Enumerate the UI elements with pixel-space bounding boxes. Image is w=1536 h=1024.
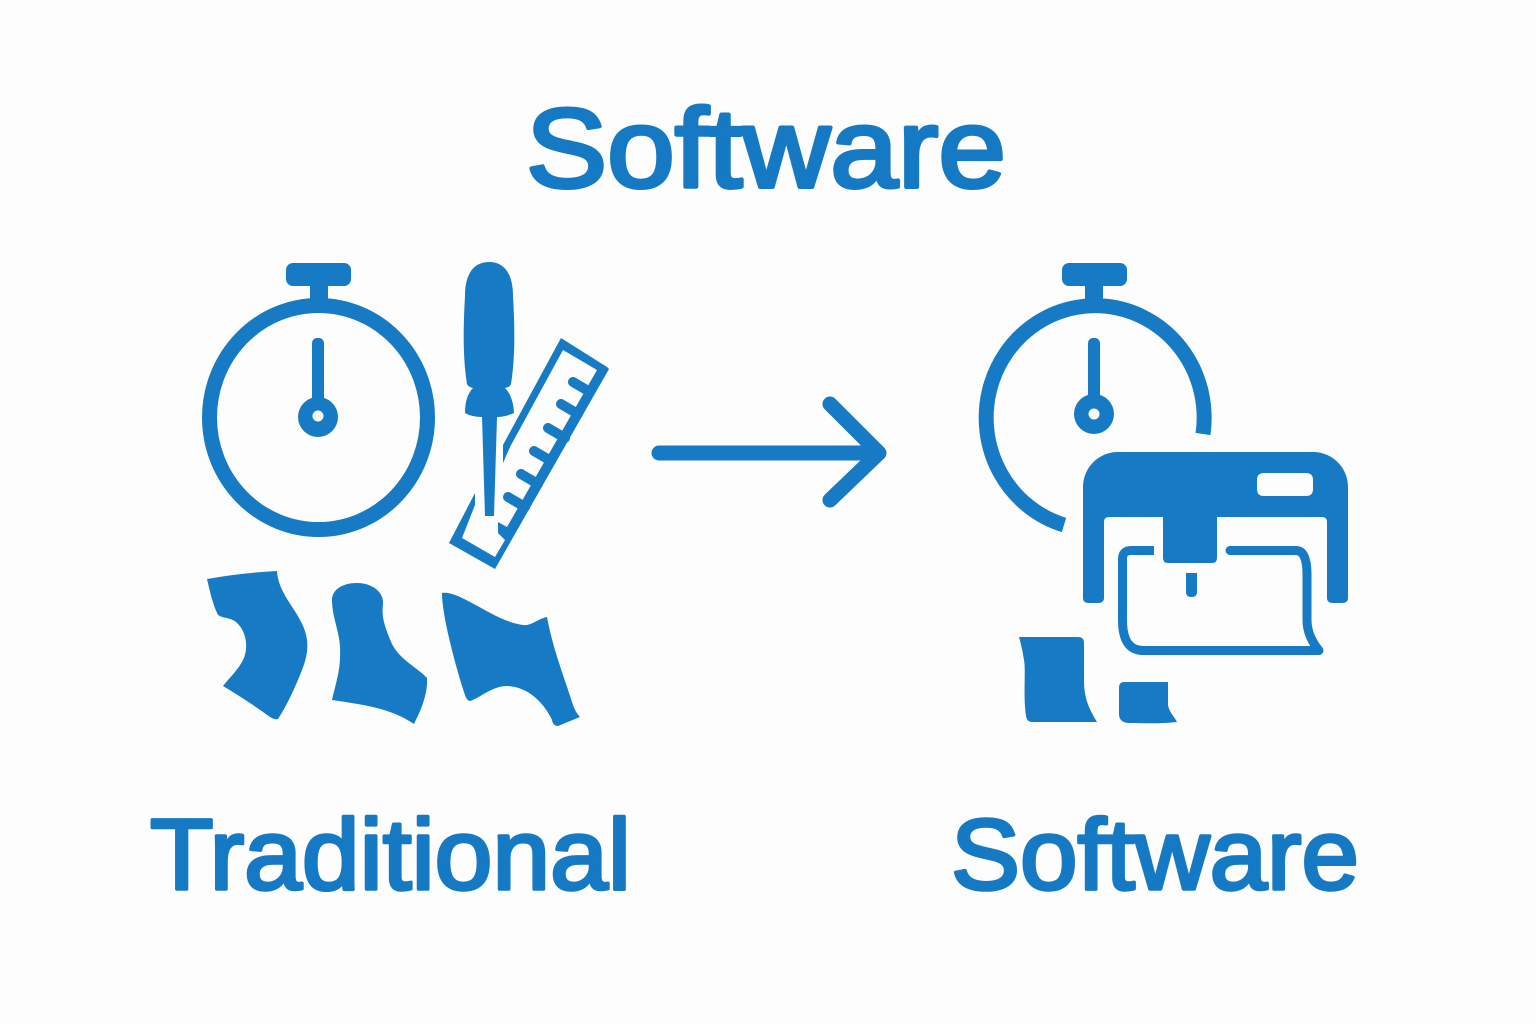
icon: material scrap 1	[207, 571, 307, 719]
icon: 3D printer body	[1083, 452, 1348, 603]
label: software: Software	[951, 799, 1359, 911]
arrow	[659, 404, 879, 500]
icon: printed block small	[1119, 682, 1177, 723]
icon: ruler	[449, 338, 609, 569]
icon: material scrap 2	[332, 583, 427, 724]
label: traditional: Traditional	[150, 799, 631, 911]
icon: printer nozzle drip	[1186, 573, 1197, 597]
icon: screwdriver	[464, 262, 514, 516]
panel: traditional	[207, 262, 609, 726]
title: Software	[526, 86, 1006, 211]
icon: printed block large	[1019, 637, 1097, 722]
icon: material scrap 3	[442, 593, 580, 726]
icon: stopwatch partial	[986, 263, 1204, 525]
icon: stopwatch	[210, 263, 428, 530]
icon: printed sheet	[1122, 550, 1319, 650]
panel: software	[986, 263, 1348, 723]
